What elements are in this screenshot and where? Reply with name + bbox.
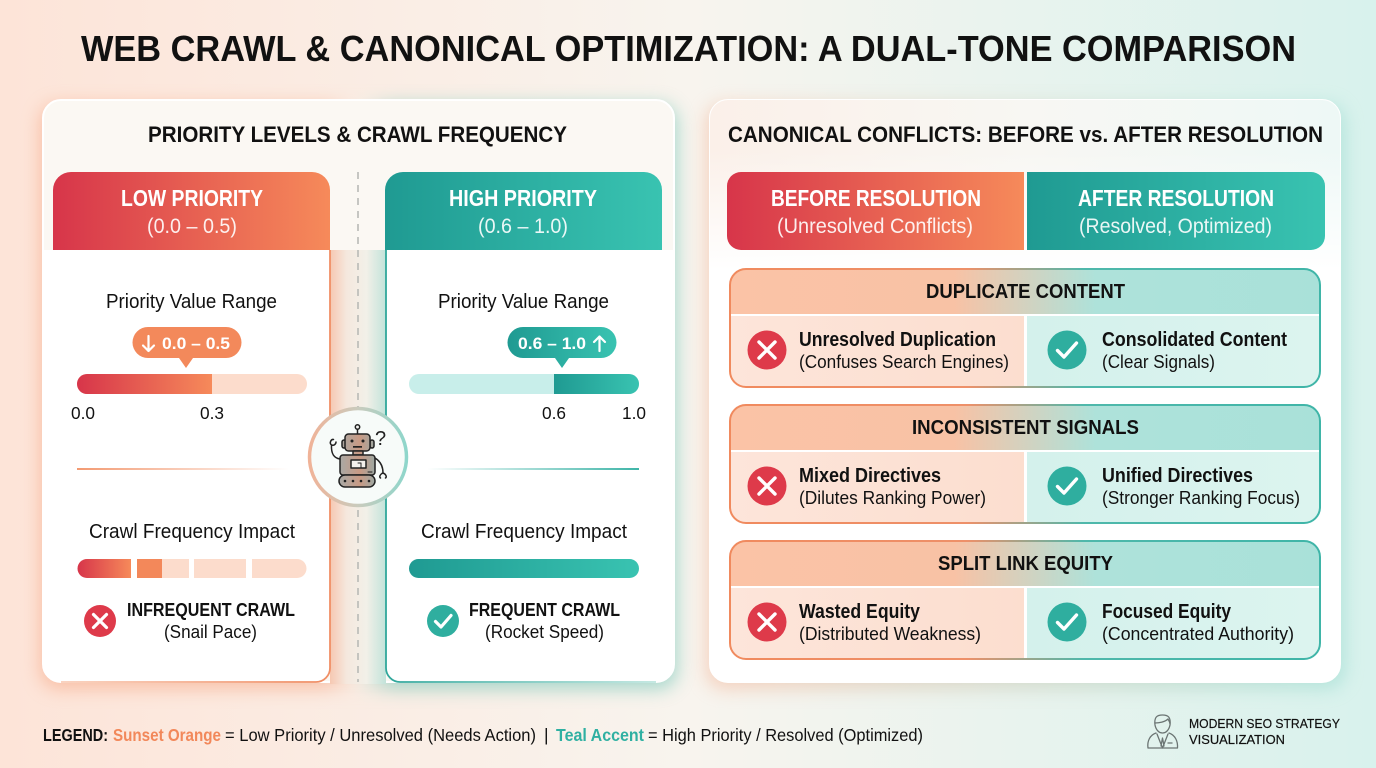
before resolution header <box>727 172 1024 250</box>
duplicate content before cell <box>730 316 1024 387</box>
split link equity before cell: (Distributed Weakness) <box>799 623 981 644</box>
duplicate content header band <box>730 269 1320 314</box>
icon: teal check <box>427 605 459 637</box>
low priority header <box>53 172 330 250</box>
credit text: VISUALIZATION <box>1189 732 1285 747</box>
credit text <box>1189 716 1340 747</box>
priority range bar <box>77 374 307 394</box>
panel heading: CANONICAL CONFLICTS: BEFORE vs. AFTER RESOLUTION <box>728 122 1323 147</box>
legend: Sunset Orange <box>113 725 221 745</box>
high priority header: (0.6 – 1.0) <box>478 215 568 238</box>
duplicate content before cell: (Confuses Search Engines) <box>799 351 1009 372</box>
duplicate content header band: DUPLICATE CONTENT <box>926 281 1125 303</box>
split link equity before cell <box>730 588 1024 659</box>
column: low priority <box>43 172 330 682</box>
panel heading: PRIORITY LEVELS & CRAWL FREQUENCY <box>148 122 567 147</box>
legend: Teal Accent <box>556 725 644 745</box>
before resolution header: (Unresolved Conflicts) <box>777 215 973 238</box>
row: duplicate content <box>730 269 1320 387</box>
row: split link equity <box>730 541 1320 659</box>
question mark: ? <box>375 428 386 450</box>
crawl frequency label: Crawl Frequency Impact <box>421 521 627 543</box>
frequent crawl text <box>469 600 620 642</box>
scale labels: 0.0 <box>71 403 95 423</box>
priority value range label: Priority Value Range <box>438 291 609 313</box>
centre channel with dashed divider <box>330 172 386 684</box>
legend: LEGEND: <box>43 725 108 745</box>
duplicate content before cell: Unresolved Duplication <box>799 329 996 351</box>
high priority header <box>385 172 662 250</box>
low priority header: LOW PRIORITY <box>121 185 263 211</box>
legend <box>43 725 923 745</box>
infrequent crawl text: (Snail Pace) <box>164 622 257 642</box>
icon: business person <box>1148 715 1178 748</box>
title: WEB CRAWL & CANONICAL OPTIMIZATION: A DUAL-TONE COMPARISON <box>81 28 1296 69</box>
crawl frequency label: Crawl Frequency Impact <box>89 521 295 543</box>
split link equity header band: SPLIT LINK EQUITY <box>938 553 1114 575</box>
credit text: MODERN SEO STRATEGY <box>1189 716 1340 731</box>
legend: | <box>544 725 549 745</box>
callout: 0.0 to 0.5 <box>132 327 241 368</box>
inconsistent signals header band: INCONSISTENT SIGNALS <box>912 417 1139 439</box>
panel: priority levels and crawl frequency <box>40 100 677 689</box>
priority value range label: Priority Value Range <box>106 291 277 313</box>
inconsistent signals before cell: Mixed Directives <box>799 465 941 487</box>
scale labels: 0.6 <box>542 403 566 423</box>
inconsistent signals header band <box>730 405 1320 450</box>
inconsistent signals after cell: Unified Directives <box>1102 465 1253 487</box>
legend: = High Priority / Resolved (Optimized) <box>648 725 923 745</box>
inconsistent signals before cell <box>730 452 1024 523</box>
split link equity after cell: Focused Equity <box>1102 601 1232 623</box>
scale labels: 0.3 <box>200 403 224 423</box>
split link equity header band <box>730 541 1320 586</box>
split link equity after cell: (Concentrated Authority) <box>1102 623 1294 644</box>
after resolution header: AFTER RESOLUTION <box>1078 185 1274 211</box>
icon: confused robot badge <box>310 408 406 506</box>
panel: canonical conflicts <box>706 100 1345 689</box>
priority range bar <box>409 374 639 394</box>
after resolution header: (Resolved, Optimized) <box>1079 215 1272 238</box>
callout: 0.0 to 0.5: 0.0 – 0.5 <box>162 334 230 353</box>
row: inconsistent signals <box>730 405 1320 523</box>
full crawl frequency bar <box>409 559 639 578</box>
low priority header: (0.0 – 0.5) <box>147 215 237 238</box>
frequent crawl text: FREQUENT CRAWL <box>469 600 620 620</box>
split link equity before cell: Wasted Equity <box>799 601 921 623</box>
before resolution header: BEFORE RESOLUTION <box>771 185 981 211</box>
icon: red cross <box>84 605 116 637</box>
callout: 0.6 to 1.0: 0.6 – 1.0 <box>518 334 586 353</box>
inconsistent signals before cell: (Dilutes Ranking Power) <box>799 487 986 508</box>
infrequent crawl text <box>127 600 295 642</box>
split link equity after cell <box>1027 588 1320 659</box>
scale labels <box>71 403 224 423</box>
inconsistent signals after cell <box>1027 452 1320 523</box>
segmented crawl frequency bar <box>78 559 307 578</box>
after resolution header <box>1027 172 1325 250</box>
duplicate content after cell: (Clear Signals) <box>1102 351 1215 372</box>
duplicate content after cell <box>1027 316 1320 387</box>
infrequent crawl text: INFREQUENT CRAWL <box>127 600 295 620</box>
high priority header: HIGH PRIORITY <box>449 185 597 211</box>
column: high priority <box>385 172 674 682</box>
scale labels: 1.0 <box>622 403 646 423</box>
legend: = Low Priority / Unresolved (Needs Action) <box>225 725 536 745</box>
frequent crawl text: (Rocket Speed) <box>485 622 604 642</box>
inconsistent signals after cell: (Stronger Ranking Focus) <box>1102 487 1300 508</box>
duplicate content after cell: Consolidated Content <box>1102 329 1287 351</box>
scale labels <box>542 403 646 423</box>
callout: 0.6 to 1.0 <box>508 327 616 368</box>
